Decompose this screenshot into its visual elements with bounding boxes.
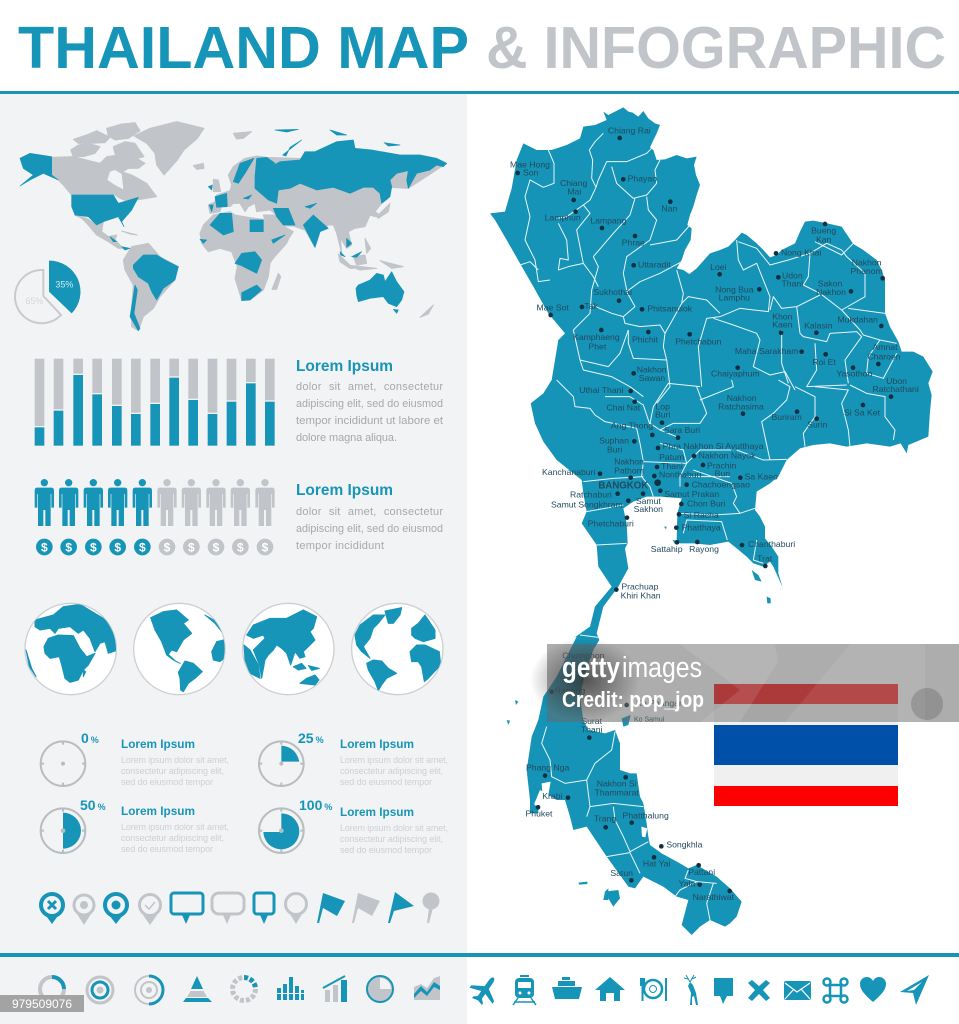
- city labels: Lamphun: [545, 213, 581, 223]
- text block: gauge 100%: Lorem Ipsum: [340, 805, 414, 819]
- text block: gauge 50%: [121, 804, 229, 854]
- city labels: Roi Et: [812, 357, 836, 367]
- text block: gauge 25%: Lorem ipsum dolor sit amet,: [340, 755, 448, 765]
- city labels: Ratchaburi: [570, 489, 612, 499]
- text block: gauge 50%: Lorem Ipsum: [121, 804, 195, 818]
- city labels: Maha Sarakham: [735, 346, 798, 356]
- city labels: Buri: [655, 410, 670, 420]
- text block: gauge 100%: Lorem ipsum dolor sit amet,: [340, 823, 448, 833]
- city labels: BANGKOK: [598, 480, 648, 491]
- icon: heart: [860, 977, 886, 1002]
- city labels: Nong Bua: [715, 285, 754, 295]
- city labels: Chaiyaphum: [711, 369, 760, 379]
- city labels: Prachuap: [621, 581, 659, 591]
- city labels: Chiang Rai: [608, 125, 651, 135]
- pie chart: 35% / 65%: [15, 261, 80, 323]
- city labels: Loei: [710, 262, 727, 272]
- city labels: Kaen: [772, 320, 793, 330]
- text block: bar chart description: [296, 358, 443, 444]
- icon: speech circle: [286, 894, 306, 924]
- globe: Americas: [134, 603, 228, 695]
- city labels: Trat: [757, 553, 773, 563]
- city labels: Mae Sot: [537, 303, 569, 313]
- text block: pictogram description: dolor sit amet, consectetur: [296, 506, 443, 518]
- icon: house: [595, 977, 625, 1001]
- province borders: [520, 133, 897, 920]
- icon: equalizer: [277, 977, 304, 1000]
- city labels: Samut Prakan: [664, 489, 719, 499]
- pictogram: dollar coins: [36, 539, 273, 555]
- text block: gauge 25%: consectetur adipiscing elit,: [340, 766, 443, 776]
- city labels: Mai: [567, 186, 581, 196]
- icon: pushpin gray: [422, 892, 440, 923]
- city labels: Kan: [816, 234, 832, 244]
- city labels: Chai Nat: [606, 403, 641, 413]
- city labels: Mae Hong: [510, 160, 550, 170]
- city labels: Nakhon: [637, 365, 667, 375]
- pictogram: dollar coins: $: [188, 540, 195, 554]
- pictogram: dollar coins: $: [164, 540, 171, 554]
- city labels: Phanom: [851, 266, 883, 276]
- icon: growth bars: [323, 976, 347, 1002]
- pictogram: dollar coins: $: [213, 540, 220, 554]
- city labels: Khon: [772, 312, 793, 322]
- city labels: Sara Buri: [664, 425, 700, 435]
- city labels: Udon: [782, 271, 803, 281]
- city labels: Sukhothai: [593, 287, 632, 297]
- gauge labels: 100%: [299, 797, 332, 813]
- pictogram: dollar coins: $: [90, 540, 97, 554]
- city labels: Ang Thong: [611, 420, 653, 430]
- watermark overlay: [530, 638, 959, 722]
- city labels: Nakhon Si: [597, 779, 637, 789]
- city labels: Ranong: [555, 685, 585, 695]
- icon: pie: [367, 976, 393, 1002]
- city labels: Samut Songkhram: [551, 499, 623, 509]
- pie chart: 35% / 65%: 65%: [25, 296, 43, 306]
- city labels: Ko Samui: [634, 716, 665, 723]
- gauge labels: 0%: [81, 730, 99, 746]
- city labels: Uttaradit: [638, 260, 671, 270]
- text block: gauge 25%: Lorem Ipsum: [340, 737, 414, 751]
- city labels: Phuket: [526, 809, 553, 819]
- city labels: Kanchanaburi: [542, 467, 595, 477]
- gauge: 100%: [258, 808, 304, 854]
- city labels: Nakhon: [816, 287, 846, 297]
- city labels: Phatthaya: [682, 523, 721, 533]
- city labels: Yala: [679, 879, 696, 889]
- icon: pyramid: [183, 976, 212, 1002]
- watermark overlay: Credit: pop_jop: [562, 687, 704, 712]
- watermark overlay: images: [622, 652, 702, 684]
- icon: donut chart: [40, 977, 64, 1001]
- city labels: Si Sa Ket: [844, 407, 881, 417]
- icon: speech box square: [254, 893, 274, 924]
- gauge: 25%: [258, 741, 304, 787]
- icon: command symbol: [824, 978, 848, 1002]
- text block: gauge 50%: Lorem ipsum dolor sit amet,: [121, 822, 229, 832]
- city labels: Kamphaeng: [573, 332, 620, 342]
- top rule: [0, 91, 959, 94]
- title: [18, 15, 946, 81]
- city labels: Amnat: [872, 342, 898, 352]
- text block: pictogram description: Lorem Ipsum: [296, 482, 393, 499]
- gauge: 0%: [40, 741, 86, 787]
- city labels: Lamphu: [719, 293, 750, 303]
- city labels: Uthai Thani: [579, 385, 623, 395]
- map fill: [490, 107, 933, 935]
- city labels: Samut: [636, 496, 661, 506]
- city labels: Songkhla: [666, 839, 703, 849]
- city labels: Charoen: [867, 351, 901, 361]
- icon: target rings: [135, 976, 163, 1004]
- pictogram: dollar coins: $: [114, 540, 121, 554]
- city labels: Buriram: [772, 412, 802, 422]
- city labels: Ubon: [886, 376, 907, 386]
- city labels: Tak: [584, 301, 598, 311]
- city labels: Chon Buri: [687, 499, 726, 509]
- text block: gauge 100%: sed do eiusmod tempor: [340, 845, 432, 855]
- text block: bar chart description: tempor incididunt ut labore et: [296, 415, 443, 427]
- icon: flag gray: [352, 893, 380, 923]
- city labels: Nakhon: [727, 393, 757, 403]
- city labels: Phatthalung: [623, 810, 669, 820]
- city labels: Hat Yai: [643, 859, 671, 869]
- globe: Asia and Australia: [243, 603, 334, 695]
- city labels: Chachoengsao: [692, 480, 750, 490]
- city labels: Krabi: [542, 791, 563, 801]
- icon: pin star: [74, 895, 94, 925]
- city labels: Surat: [581, 716, 603, 726]
- text block: bar chart description: dolore magna aliqua.: [296, 432, 397, 444]
- text block: gauge 0%: Lorem ipsum dolor sit amet,: [121, 755, 229, 765]
- icon: flag teal: [317, 893, 345, 923]
- text block: bar chart description: adipiscing elit, sed do eiusmod: [296, 398, 443, 410]
- pie chart: 35% / 65%: 35%: [55, 279, 73, 289]
- city labels: Lampang: [590, 215, 627, 225]
- city labels: Ratchasima: [718, 401, 764, 411]
- image id tag: 979509076: [12, 997, 72, 1011]
- icon: speech box wide: [171, 893, 203, 924]
- icon: train: [513, 975, 536, 1005]
- pictogram: people: [35, 479, 275, 526]
- icon: map pin: [714, 978, 733, 1004]
- city labels: Phitsanulok: [647, 304, 693, 314]
- city labels: Thani: [782, 279, 803, 289]
- city labels: Phang Nga: [526, 763, 570, 773]
- city labels: Lop: [655, 401, 670, 411]
- city labels: Phra Nakhon Si Ayutthaya: [663, 441, 764, 451]
- text block: gauge 0%: Lorem Ipsum: [121, 737, 195, 751]
- gauge labels: [80, 730, 332, 813]
- city labels: Sawan: [639, 373, 665, 383]
- text block: gauge 25%: sed do eiusmod tempor: [340, 777, 432, 787]
- city labels: Phetchabun: [675, 336, 722, 346]
- city labels: Chumphon: [562, 650, 605, 660]
- city labels: Thani: [661, 461, 683, 471]
- city labels: Khiri Khan: [621, 590, 661, 600]
- text block: pictogram description: tempor incididunt: [296, 540, 384, 552]
- city labels: [510, 125, 919, 902]
- city labels: Nakhon Nayok: [699, 450, 756, 460]
- text block: bar chart description: dolor sit amet, consectetur: [296, 381, 443, 393]
- city labels: Trang: [594, 814, 616, 824]
- icon: dashed ring: [232, 978, 256, 1000]
- city labels: Phayao: [628, 174, 657, 184]
- icon: ship: [552, 977, 582, 999]
- pictogram: dollar coins: $: [41, 540, 48, 554]
- city labels: Sakhon: [634, 504, 663, 514]
- city labels: Yasothon: [836, 369, 872, 379]
- icon: plane: [466, 970, 505, 1009]
- icon: navigation arrow: [900, 975, 929, 1005]
- city labels: Buri: [715, 469, 730, 479]
- bar chart: [35, 359, 275, 446]
- city labels: Bueng: [811, 225, 836, 235]
- background panel: left: [0, 93, 467, 1024]
- icon: plate and cutlery: [640, 978, 667, 1001]
- bottom rule: [0, 953, 959, 957]
- icon: swirl: [87, 977, 113, 1003]
- world map: [20, 122, 447, 331]
- flag of Thailand: [714, 684, 898, 806]
- city labels: Narathiwat: [693, 892, 735, 902]
- city labels: Nong Khai: [781, 248, 821, 258]
- text block: gauge 50%: sed do eiusmod tempor: [121, 844, 213, 854]
- pictogram: dollar coins: $: [139, 540, 146, 554]
- globe: Africa and Europe: [25, 603, 118, 695]
- text block: gauge 0%: consectetur adipiscing elit,: [121, 766, 224, 776]
- gauge: 50%: [40, 808, 86, 854]
- province capital dots: [515, 136, 893, 893]
- icon row: travel symbols: [466, 970, 929, 1009]
- globes: [25, 603, 443, 695]
- gauge labels: 25%: [298, 730, 324, 746]
- city labels: Sattahip: [651, 544, 683, 554]
- city labels: Prachin: [707, 460, 737, 470]
- city labels: Nakhon: [852, 258, 882, 268]
- watermark overlay: getty: [562, 652, 620, 684]
- image id tag: [0, 995, 84, 1012]
- city labels: Kalasin: [804, 320, 833, 330]
- city labels: Chanthaburi: [748, 539, 795, 549]
- city labels: Suphan: [599, 436, 629, 446]
- icon: pennant teal: [388, 892, 414, 923]
- pictogram: dollar coins: $: [237, 540, 244, 554]
- city labels: Rayong: [689, 544, 719, 554]
- city labels: Thammarat: [595, 788, 639, 798]
- city labels: Ratchathani: [873, 384, 919, 394]
- city labels: Phetchaburi: [588, 519, 634, 529]
- city labels: Nan: [661, 203, 677, 213]
- text block: gauge 0%: sed do eiusmod tempor: [121, 777, 213, 787]
- city labels: Patum: [659, 452, 684, 462]
- icon row: charts: [40, 976, 440, 1004]
- city labels: Satun: [610, 868, 633, 878]
- city labels: Pathom: [614, 465, 644, 475]
- city labels: Chiang: [560, 178, 588, 188]
- icon: pin dot: [105, 894, 127, 924]
- city labels: Phrae: [622, 238, 645, 248]
- pictogram: dollar coins: $: [65, 540, 72, 554]
- text block: gauge 50%: consectetur adipiscing elit,: [121, 833, 224, 843]
- text block: pictogram description: [296, 482, 443, 552]
- text block: pictogram description: adipiscing elit, sed do eiusmod: [296, 523, 443, 535]
- title: & INFOGRAPHIC: [486, 15, 946, 81]
- text block: gauge 100%: consectetur adipiscing elit,: [340, 834, 443, 844]
- city labels: Phet: [588, 342, 607, 352]
- icon row: map pins: [41, 892, 440, 925]
- city labels: Buri: [607, 445, 622, 455]
- icon: pin cross: [41, 894, 63, 924]
- city labels: Phichit: [632, 334, 659, 344]
- text block: gauge 25%: [340, 737, 448, 787]
- white lake near Songkhla: [641, 827, 647, 837]
- city labels: Mukdahan: [837, 314, 878, 324]
- city labels: Thani: [581, 725, 603, 735]
- text block: gauge 0%: [121, 737, 229, 787]
- gauge labels: 50%: [80, 797, 106, 813]
- icon: envelope: [784, 981, 811, 1000]
- city labels: Nakhon: [614, 456, 644, 466]
- map of Thailand: [490, 107, 933, 935]
- city labels: Nonthaburi: [659, 469, 701, 479]
- city labels: Sa Kaeo: [745, 471, 778, 481]
- city labels: Surin: [807, 420, 828, 430]
- gauges: [40, 741, 304, 854]
- icon: area chart: [414, 976, 440, 1000]
- icon: cross: [748, 980, 770, 1001]
- icon: speech bubble wide: [212, 893, 244, 924]
- pictogram: dollar coins: $: [262, 540, 269, 554]
- city labels: Ko Phangan: [636, 698, 684, 708]
- icon: deer: [684, 975, 698, 1005]
- globe: Atlantic view: [352, 603, 443, 695]
- city labels: Pattani: [688, 867, 715, 877]
- title: THAILAND MAP: [18, 15, 469, 81]
- city labels: Si Racha: [684, 510, 719, 520]
- icon: pin check: [140, 894, 160, 925]
- city labels: Son: [523, 168, 539, 178]
- text block: bar chart description: Lorem Ipsum: [296, 358, 393, 375]
- text block: gauge 100%: [340, 805, 448, 855]
- city labels: Sakon: [818, 279, 842, 289]
